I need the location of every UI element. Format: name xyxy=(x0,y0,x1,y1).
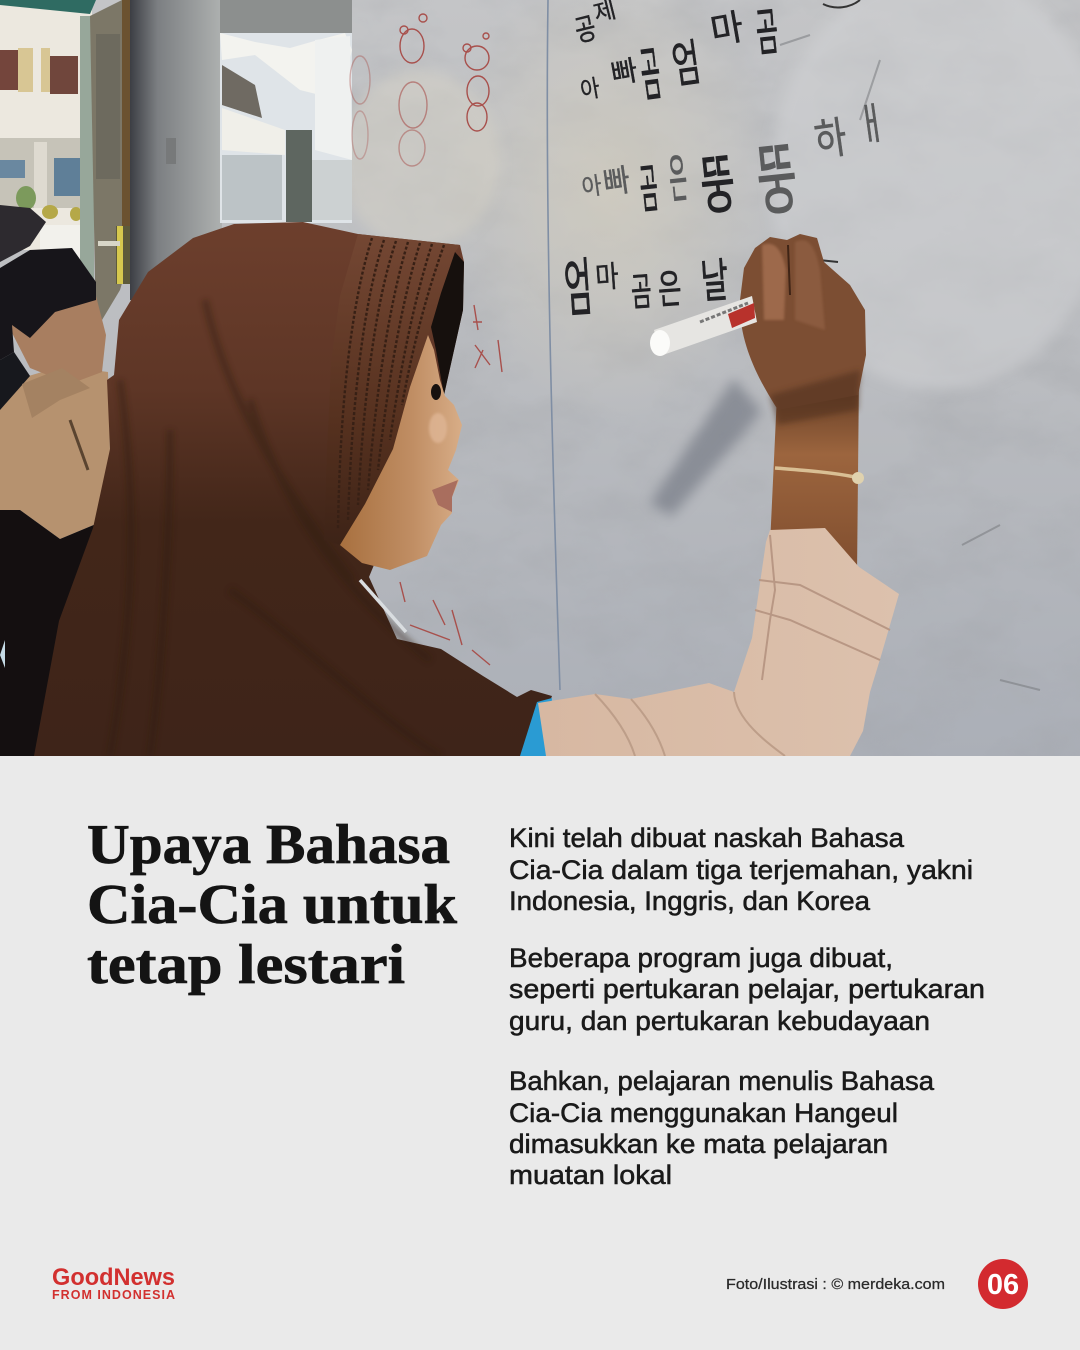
title: tetap lestari xyxy=(87,934,405,996)
body text: paragraph 1: Indonesia, Inggris, dan Korea xyxy=(509,886,871,916)
page number badge: 06 xyxy=(987,1269,1019,1301)
handwritten Korean text: 빠 xyxy=(601,163,632,201)
body text: paragraph 3: dimasukkan ke mata pelajaran xyxy=(509,1129,888,1159)
title: Upaya Bahasa xyxy=(87,814,450,876)
handwritten Korean text: 하 xyxy=(812,113,850,166)
inner hood shadow xyxy=(431,252,464,395)
lanyard xyxy=(360,580,406,632)
title xyxy=(87,814,458,996)
face xyxy=(340,335,462,570)
body text: paragraph 1: Cia-Cia dalam tiga terjemahan, yakni xyxy=(509,855,973,885)
body text: paragraph 3: muatan lokal xyxy=(509,1160,672,1190)
handwritten Korean text: 마 xyxy=(707,7,746,52)
handwritten Korean text: ㅐ xyxy=(854,98,889,150)
logo: GoodNews from Indonesia: FROM INDONESIA xyxy=(52,1288,175,1302)
hijab xyxy=(34,222,552,770)
outdoor view and door xyxy=(0,0,138,330)
bracelet xyxy=(775,468,864,484)
body text: paragraph 3 xyxy=(509,1066,935,1190)
handwritten Korean text: 곰 xyxy=(637,160,661,220)
body text: paragraph 3: Cia-Cia menggunakan Hangeul xyxy=(509,1098,898,1128)
handwritten Korean text: 아 xyxy=(578,75,602,104)
handwritten Korean text: 뚱 xyxy=(753,136,802,226)
handwritten Korean text: 뚱 xyxy=(697,148,739,224)
handwritten Korean text: 곰 xyxy=(753,4,781,62)
logo: GoodNews from Indonesia: GoodNews xyxy=(52,1264,175,1291)
body text: paragraph 2: seperti pertukaran pelajar, pertukaran xyxy=(509,974,985,1004)
blue patterned lining xyxy=(520,698,552,756)
title: Cia-Cia untuk xyxy=(87,874,458,936)
child in the background xyxy=(0,205,110,756)
marker xyxy=(650,296,757,356)
whiteboard xyxy=(0,0,1080,756)
page number badge xyxy=(978,1259,1028,1309)
handwritten Korean text: 빠 xyxy=(609,55,640,91)
red marker doodles xyxy=(350,14,502,665)
body text: paragraph 1 xyxy=(509,823,973,916)
handwritten Korean text: 날 xyxy=(699,256,730,309)
handwritten Korean text: 공 xyxy=(571,11,600,49)
handwritten Korean text: 곰 xyxy=(630,269,653,315)
photo: girl writing Hangeul on a whiteboard xyxy=(0,0,1080,770)
wall pillar and reflection on board xyxy=(130,0,352,300)
sleeve xyxy=(538,528,899,756)
handwritten Korean text: 엄 xyxy=(562,253,595,325)
body text: paragraph 2 xyxy=(509,943,985,1036)
handwritten Korean text xyxy=(562,0,889,325)
handwritten Korean text: 곰 xyxy=(637,42,665,109)
handwritten Korean text: 은 xyxy=(656,267,683,314)
hand xyxy=(740,234,866,425)
body text: paragraph 2: Beberapa program juga dibuat, xyxy=(509,943,893,973)
handwritten Korean text: 은 xyxy=(666,150,690,210)
forearm xyxy=(770,390,859,565)
handwritten Korean text: 엄 xyxy=(669,35,704,94)
handwritten Korean text: 마 xyxy=(594,259,620,294)
body text: paragraph 3: Bahkan, pelajaran menulis Bahasa xyxy=(509,1066,935,1096)
photo credit: Foto/Ilustrasi : © merdeka.com xyxy=(726,1277,945,1293)
hood band xyxy=(356,234,460,245)
handwritten Korean text: 아 xyxy=(580,171,603,201)
body text: paragraph 2: guru, dan pertukaran kebudayaan xyxy=(509,1006,930,1036)
hand and marker shadow on board xyxy=(650,378,762,516)
body text: paragraph 1: Kini telah dibuat naskah Bahasa xyxy=(509,823,905,853)
